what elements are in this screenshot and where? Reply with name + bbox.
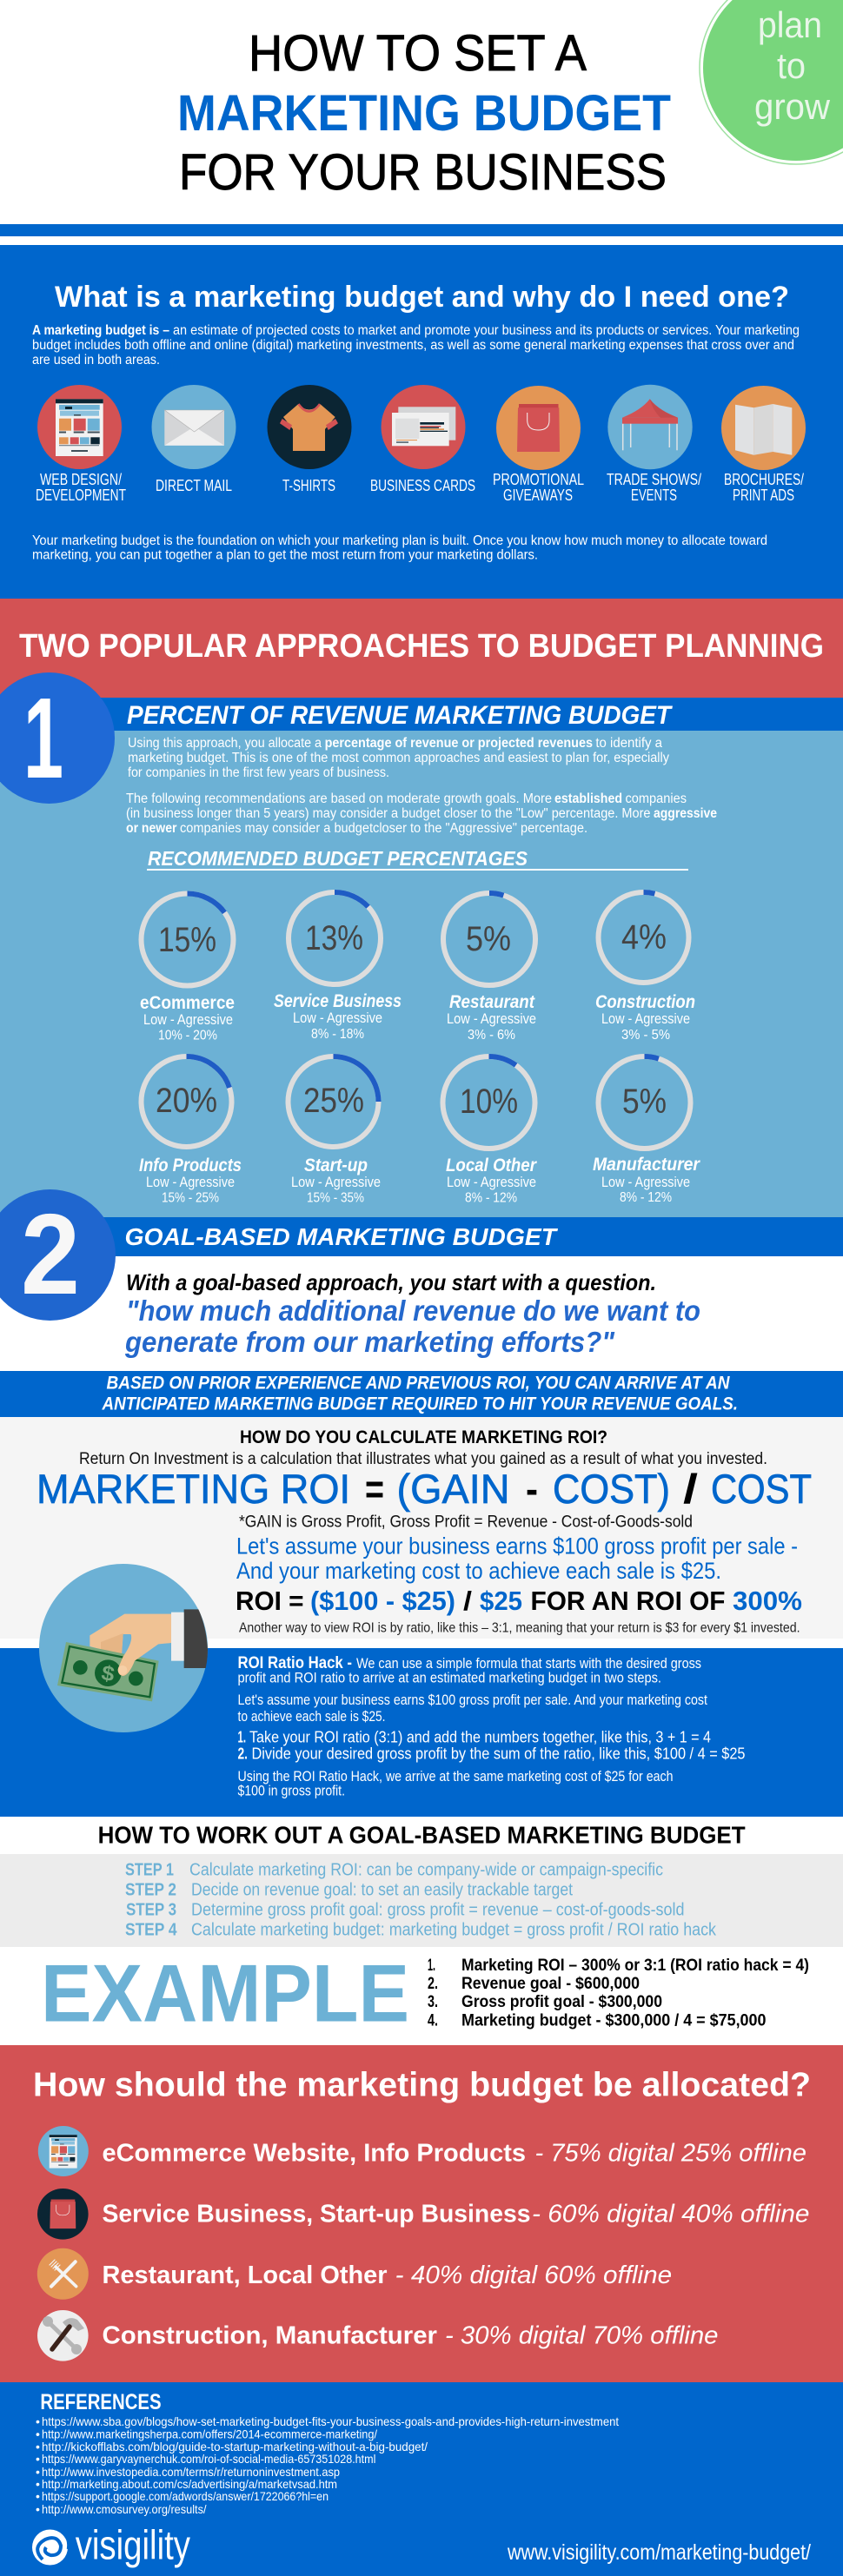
text block: approach intro: marketing budget. This is one of the most common approaches and easiest to plan for, especially: [128, 751, 669, 765]
text block: approach intro: percentage of revenue or projected revenues: [325, 736, 593, 751]
title: MARKETING BUDGET: [177, 85, 671, 142]
text block: ROI ratio hack: Divide your desired gross profit by the sum of the ratio, like this, $100 / 4 = $25: [252, 1745, 746, 1763]
icon labels: DIRECT MAIL: [156, 477, 232, 494]
gauge: service business 13%: Service Business: [274, 991, 402, 1011]
references list: •: [36, 2477, 40, 2491]
formula: ROI example: ROI =: [236, 1586, 304, 1616]
text block: ROI ratio hack: to achieve each sale is $25.: [238, 1709, 386, 1725]
gauge: local other 10%: [443, 1056, 538, 1206]
text block: definition: an estimate of projected costs to market and promote your business and its products or services. Your marketing: [173, 323, 800, 338]
references list: http://www.investopedia.com/terms/r/returnoninvestment.asp: [42, 2465, 340, 2479]
gauge: manufacturer 5%: Manufacturer: [593, 1155, 701, 1175]
example list: 2.: [428, 1975, 438, 1993]
logo: visigility: [32, 2522, 190, 2568]
gauge: start-up 25%: 25%: [303, 1082, 364, 1120]
text block: ROI ratio hack: 2.: [238, 1745, 248, 1763]
gauge: construction 4%: Low - Agressive: [601, 1011, 690, 1027]
icon labels: TRADE SHOWS/: [607, 471, 701, 488]
gauge: info products 20%: 15% - 25%: [162, 1190, 219, 1206]
gauge: restaurant 5%: Low - Agressive: [447, 1011, 536, 1027]
references list: http://kickofflabs.com/blog/guide-to-startup-marketing-without-a-big-budget/: [42, 2440, 428, 2453]
example list: Revenue goal - $600,000: [461, 1975, 640, 1993]
gauge: manufacturer 5%: [593, 1056, 701, 1205]
gauge: service business 13%: 8% - 18%: [311, 1027, 364, 1042]
formula: marketing ROI: (GAIN: [396, 1466, 509, 1512]
gauge: start-up 25%: Start-up: [304, 1156, 368, 1175]
row: construction allocation: [37, 2310, 719, 2361]
gauge: info products 20%: Info Products: [139, 1156, 242, 1175]
gauge: local other 10%: Local Other: [446, 1156, 538, 1175]
gauge: construction 4%: Construction: [595, 992, 695, 1012]
row: ecommerce allocation: - 75% digital 25% offline: [535, 2139, 806, 2167]
gauge: info products 20%: Low - Agressive: [146, 1175, 235, 1190]
gauge: eCommerce 15%: [140, 893, 235, 1043]
text block: ROI ratio hack: ROI Ratio Hack -: [238, 1654, 352, 1672]
references list: http://www.marketingsherpa.com/offers/2014-ecommerce-marketing/: [42, 2427, 377, 2440]
gauge: start-up 25%: [289, 1056, 381, 1206]
gauge: restaurant 5%: Restaurant: [449, 992, 535, 1012]
banner: prior experience: [0, 1371, 843, 1417]
text block: recommendations: companies may consider a budgetcloser to the "Aggressive" percentage.: [180, 821, 587, 836]
heading: goal-based marketing budget: GOAL-BASED MARKETING BUDGET: [125, 1223, 559, 1250]
formula: marketing ROI: -: [526, 1466, 538, 1512]
formula: marketing ROI: [37, 1466, 812, 1512]
text block: ROI ratio hack: We can use a simple formula that starts with the desired gross: [356, 1656, 701, 1672]
text block: ROI ratio hack: Let's assume your business earns $100 gross profit per sale. And your marketing cost: [238, 1692, 707, 1708]
banner: prior experience: ANTICIPATED MARKETING BUDGET REQUIRED TO HIT YOUR REVENUE GOALS.: [102, 1394, 738, 1414]
panel: calculate marketing ROI: [0, 1417, 843, 1817]
icon: brochure: [721, 386, 806, 470]
steps list: Calculate marketing ROI: can be company-wide or campaign-specific: [189, 1861, 663, 1880]
text block: definition: A marketing budget is –: [32, 323, 169, 338]
text block: foundation: marketing, you can put together a plan to get the most return from your marketing dollars.: [32, 547, 538, 563]
heading: how should the budget be allocated: How should the marketing budget be allocated?: [33, 2066, 811, 2104]
heading: example: EXAMPLE: [41, 1948, 409, 2039]
badge: plan to grow: grow: [754, 86, 831, 127]
text block: approach intro: to identify a: [595, 736, 662, 751]
text block: recommendations: companies: [626, 791, 687, 806]
text block: definition: [32, 323, 800, 368]
title: HOW TO SET A: [249, 25, 587, 82]
panel: how to work out goal-based budget: [0, 1822, 843, 1947]
text block: ROI ratio hack: 1.: [238, 1729, 246, 1746]
row: service business allocation: - 60% digital 40% offline: [532, 2201, 810, 2228]
text block: blue question: "how much additional revenue do we want to: [126, 1295, 700, 1327]
panel: title header: [0, 0, 843, 236]
formula: ROI example: FOR AN ROI OF: [530, 1586, 725, 1616]
text block: assumption: [236, 1533, 798, 1584]
steps list: [0, 1854, 843, 1947]
gauge: info products 20%: 20%: [156, 1082, 217, 1120]
steps list: Determine gross profit goal: gross profit = revenue – cost-of-goods-sold: [191, 1901, 685, 1920]
title: [177, 25, 671, 201]
gauge: service business 13%: 13%: [305, 919, 363, 957]
icon: t-shirt: [268, 385, 351, 469]
icon: trade show tent: [607, 385, 693, 469]
gauge: start-up 25%: Low - Agressive: [291, 1175, 381, 1190]
example list: 4.: [428, 2012, 438, 2030]
number badge 2: [0, 1189, 116, 1321]
icon labels: PROMOTIONAL: [493, 471, 584, 488]
text block: approach intro: [128, 736, 669, 780]
text block: approach intro: Using this approach, you allocate a: [128, 736, 322, 751]
text block: question intro: With a goal-based approach, you start with a question.: [126, 1269, 656, 1295]
heading: percent of revenue: PERCENT OF REVENUE MARKETING BUDGET: [127, 701, 673, 730]
heading: how to work out: HOW TO WORK OUT A GOAL-BASED MARKETING BUDGET: [98, 1822, 746, 1849]
row: restaurant allocation: Restaurant, Local Other: [103, 2261, 388, 2289]
gauge: construction 4%: 3% - 5%: [621, 1028, 670, 1043]
icon labels: EVENTS: [631, 487, 677, 504]
badge: plan to grow: to: [777, 45, 806, 86]
text block: assumption: And your marketing cost to achieve each sale is $25.: [236, 1558, 721, 1584]
gauge: eCommerce 15%: 15%: [158, 921, 216, 959]
icon labels: [36, 471, 804, 504]
banner: prior experience: BASED ON PRIOR EXPERIENCE AND PREVIOUS ROI, YOU CAN ARRIVE AT AN: [106, 1374, 730, 1394]
steps list: Decide on revenue goal: to set an easily trackable target: [191, 1881, 573, 1900]
text block: ratio note: Another way to view ROI is by ratio, like this – 3:1, meaning that your return is $3 for every $1 invested.: [239, 1621, 800, 1636]
number badge 1: 1: [23, 674, 63, 802]
formula: marketing ROI: /: [683, 1466, 698, 1512]
text block: ROI definition: Return On Investment is a calculation that illustrates what you gained as a result of what you invested.: [79, 1450, 767, 1468]
text block: recommendations: The following recommendations are based on moderate growth goals. More: [126, 791, 552, 806]
formula: ROI example: ($100 - $25): [310, 1586, 455, 1616]
number badge 2: 2: [21, 1190, 80, 1318]
text block: definition: budget includes both offline and online (digital) marketing investments, as well as some general marketing expenses that cross over and: [32, 338, 794, 353]
logo: visigility: visigility: [76, 2522, 190, 2568]
icon labels: GIVEAWAYS: [503, 487, 573, 504]
gauge: eCommerce 15%: eCommerce: [140, 993, 235, 1013]
gauge: local other 10%: Low - Agressive: [447, 1175, 536, 1190]
panel: example: [41, 1948, 809, 2039]
example list: [428, 1957, 809, 2030]
gauge: eCommerce 15%: 10% - 20%: [158, 1029, 217, 1043]
references list: •: [36, 2414, 40, 2428]
text block: ROI ratio hack: $100 in gross profit.: [238, 1784, 345, 1799]
icon labels: PRINT ADS: [733, 487, 794, 504]
example list: 1.: [428, 1957, 435, 1975]
text block: ROI ratio hack: Using the ROI Ratio Hack, we arrive at the same marketing cost of $25 for each: [238, 1769, 673, 1785]
references list: •: [36, 2440, 40, 2453]
example list: Marketing ROI – 300% or 3:1 (ROI ratio hack = 4): [461, 1957, 809, 1975]
note: gain definition: *GAIN is Gross Profit, Gross Profit = Revenue - Cost-of-Goods-sold: [239, 1513, 693, 1531]
icon labels: BUSINESS CARDS: [370, 477, 475, 494]
gauge: info products 20%: [139, 1056, 242, 1206]
text block: blue question: [124, 1295, 700, 1358]
formula: ROI example: /: [463, 1586, 472, 1616]
row: ecommerce allocation: eCommerce Website, Info Products: [103, 2139, 526, 2167]
references list: https://support.google.com/adwords/answer/1722066?hl=en: [42, 2489, 329, 2503]
icon: business cards: [381, 385, 466, 469]
row: restaurant allocation: - 40% digital 60% offline: [395, 2261, 672, 2289]
gauge: construction 4%: [595, 892, 695, 1043]
text block: ROI ratio hack: [238, 1654, 746, 1799]
formula: ROI example: $25: [480, 1586, 522, 1616]
row: construction allocation: Construction, Manufacturer: [103, 2321, 437, 2349]
gauge: restaurant 5%: 5%: [466, 920, 511, 958]
panel: two popular approaches: [0, 599, 843, 698]
references list: •: [36, 2427, 40, 2440]
icon labels: DEVELOPMENT: [36, 487, 126, 504]
row: service business allocation: Service Business, Start-up Business: [103, 2201, 530, 2228]
text block: approach intro: for companies in the first few years of business.: [128, 765, 389, 780]
references list: •: [36, 2489, 40, 2503]
icon labels: WEB DESIGN/: [40, 471, 122, 488]
heading: how do you calculate: HOW DO YOU CALCULATE MARKETING ROI?: [240, 1427, 607, 1447]
formula: ROI example: [236, 1586, 802, 1616]
text block: ROI ratio hack: Take your ROI ratio (3:1) and add the numbers together, like this, 3 + 1 = 4: [249, 1729, 711, 1746]
gauge: manufacturer 5%: 5%: [622, 1083, 667, 1121]
panel: approach 2 goal-based: [0, 1189, 843, 1371]
gauge: manufacturer 5%: 8% - 12%: [620, 1190, 672, 1205]
text block: ROI ratio hack: profit and ROI ratio to arrive at an estimated marketing budget in two steps.: [238, 1671, 661, 1686]
references list: http://www.cmosurvey.org/results/: [42, 2502, 207, 2516]
icon: direct mail: [151, 385, 236, 469]
text block: recommendations: [126, 791, 717, 836]
text block: foundation: [32, 533, 767, 563]
gauge: local other 10%: 8% - 12%: [465, 1190, 517, 1206]
gauge: start-up 25%: 15% - 35%: [307, 1190, 364, 1206]
panel: references and footer: [0, 2382, 843, 2576]
gauge: eCommerce 15%: Low - Agressive: [143, 1012, 233, 1028]
icon labels: BROCHURES/: [724, 471, 804, 488]
gauge: service business 13%: [274, 892, 402, 1042]
references list: [36, 2414, 619, 2516]
panel: what is a marketing budget: [0, 245, 843, 599]
row: service business allocation: [37, 2189, 810, 2240]
icon: promotional bag: [496, 386, 581, 470]
steps list: Calculate marketing budget: marketing budget = gross profit / ROI ratio hack: [191, 1921, 717, 1940]
formula: ROI example: 300%: [733, 1586, 802, 1616]
gauge: manufacturer 5%: Low - Agressive: [601, 1175, 690, 1190]
references list: •: [36, 2502, 40, 2516]
text block: recommendations: aggressive: [654, 806, 717, 821]
references list: •: [36, 2465, 40, 2479]
icon: hand holding money: $: [100, 1661, 116, 1686]
gauge: restaurant 5%: 3% - 6%: [468, 1028, 515, 1043]
example list: Gross profit goal - $300,000: [461, 1993, 662, 2011]
row: construction allocation: - 30% digital 70% offline: [445, 2321, 718, 2349]
text block: definition: are used in both areas.: [32, 353, 160, 368]
icon: web design: [37, 385, 122, 469]
badge: plan to grow: plan: [758, 4, 822, 45]
panel: budget allocation: [0, 2045, 843, 2382]
icon labels: T-SHIRTS: [282, 477, 335, 494]
gauge: restaurant 5%: [443, 893, 536, 1043]
heading: what is a marketing budget: What is a marketing budget and why do I need one?: [55, 281, 789, 314]
example list: Marketing budget - $300,000 / 4 = $75,000: [461, 2012, 767, 2030]
references list: https://www.sba.gov/blogs/how-set-marketing-budget-fits-your-business-goals-and-provides-high-return-investment: [42, 2414, 619, 2428]
badge: plan to grow: [700, 0, 843, 164]
references list: http://marketing.about.com/cs/advertising/a/marketvsad.htm: [42, 2477, 337, 2491]
formula: marketing ROI: MARKETING ROI: [37, 1466, 350, 1512]
steps list: STEP 4: [125, 1921, 177, 1940]
gauge: construction 4%: 4%: [621, 918, 667, 957]
text block: recommendations: or newer: [126, 821, 177, 836]
heading: references: REFERENCES: [40, 2390, 162, 2414]
formula: marketing ROI: COST): [553, 1466, 670, 1512]
text block: foundation: Your marketing budget is the foundation on which your marketing plan is built. Once you know how much money to allocate toward: [32, 533, 767, 548]
steps list: STEP 2: [125, 1881, 176, 1900]
formula: marketing ROI: COST: [711, 1466, 812, 1512]
text block: recommendations: established: [554, 791, 622, 806]
gauge: local other 10%: 10%: [460, 1083, 518, 1121]
gauge: service business 13%: Low - Agressive: [293, 1010, 382, 1026]
steps list: STEP 1: [125, 1861, 174, 1880]
text block: recommendations: (in business longer than 5 years) may consider a budget closer to the "Low" percentage. More: [126, 806, 650, 821]
formula: marketing ROI: =: [365, 1466, 384, 1512]
panel: approach 1 percent of revenue: [0, 672, 843, 1217]
references list: •: [36, 2452, 40, 2466]
references list: https://www.garyvaynerchuk.com/roi-of-social-media-657351028.html: [42, 2452, 375, 2466]
title: FOR YOUR BUSINESS: [179, 144, 667, 201]
icon: hand holding money: [39, 1564, 208, 1732]
heading: recommended budget percentages: RECOMMENDED BUDGET PERCENTAGES: [148, 847, 528, 870]
row: restaurant allocation: [37, 2248, 672, 2300]
row: ecommerce allocation: [38, 2126, 806, 2176]
example list: 3.: [428, 1993, 438, 2011]
number badge 1: [0, 672, 115, 804]
steps list: STEP 3: [126, 1901, 176, 1920]
text block: blue question: generate from our marketing efforts?": [124, 1326, 614, 1358]
